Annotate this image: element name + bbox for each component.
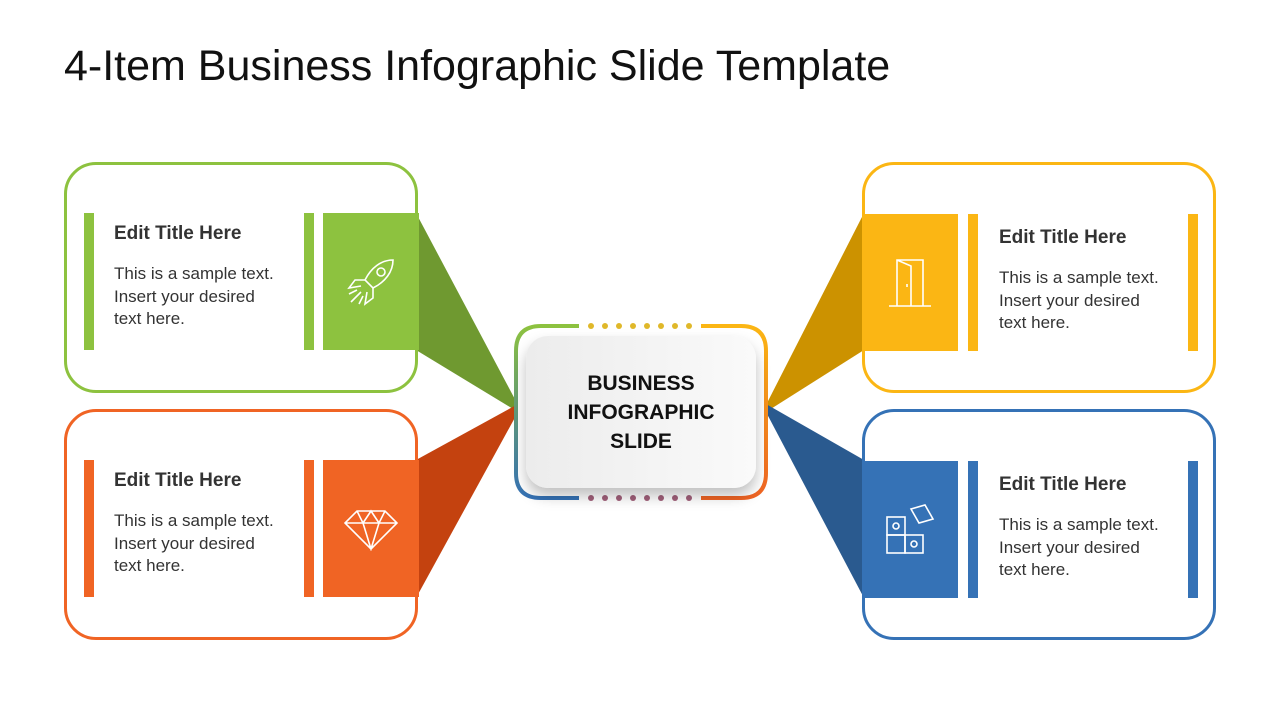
text: yellow: This is a sample text. Insert your desired text here. xyxy=(999,268,1159,332)
text: green xyxy=(114,223,274,328)
panel: blue xyxy=(862,409,1216,640)
text: blue: This is a sample text. Insert your desired text here. xyxy=(999,515,1159,579)
panel: orange xyxy=(64,409,418,640)
text: blue xyxy=(999,474,1159,579)
connector: blue xyxy=(766,404,864,598)
connector: orange xyxy=(416,404,518,598)
center card: SLIDE xyxy=(610,430,672,452)
icon: door xyxy=(862,214,958,351)
panel: yellow xyxy=(862,162,1216,393)
icon: diamond xyxy=(323,460,419,597)
center card xyxy=(526,336,756,488)
text: orange xyxy=(114,470,274,575)
text: yellow xyxy=(999,227,1159,332)
title: 4-Item Business Infographic Slide Template xyxy=(64,42,890,90)
center card: INFOGRAPHIC xyxy=(568,400,714,424)
icon: puzzle xyxy=(862,461,958,598)
connector: green xyxy=(416,213,518,412)
text: orange: This is a sample text. Insert your desired text here. xyxy=(114,511,274,575)
center card: BUSINESS xyxy=(587,372,695,394)
text: green: This is a sample text. Insert your desired text here. xyxy=(114,264,274,328)
center hub xyxy=(514,323,768,504)
text: orange: Edit Title Here xyxy=(114,470,241,491)
icon: rocket xyxy=(323,213,419,350)
text: green: Edit Title Here xyxy=(114,223,241,244)
panel: green xyxy=(64,162,418,393)
text: blue: Edit Title Here xyxy=(999,474,1126,495)
connector: yellow xyxy=(766,213,864,412)
text: yellow: Edit Title Here xyxy=(999,227,1126,248)
